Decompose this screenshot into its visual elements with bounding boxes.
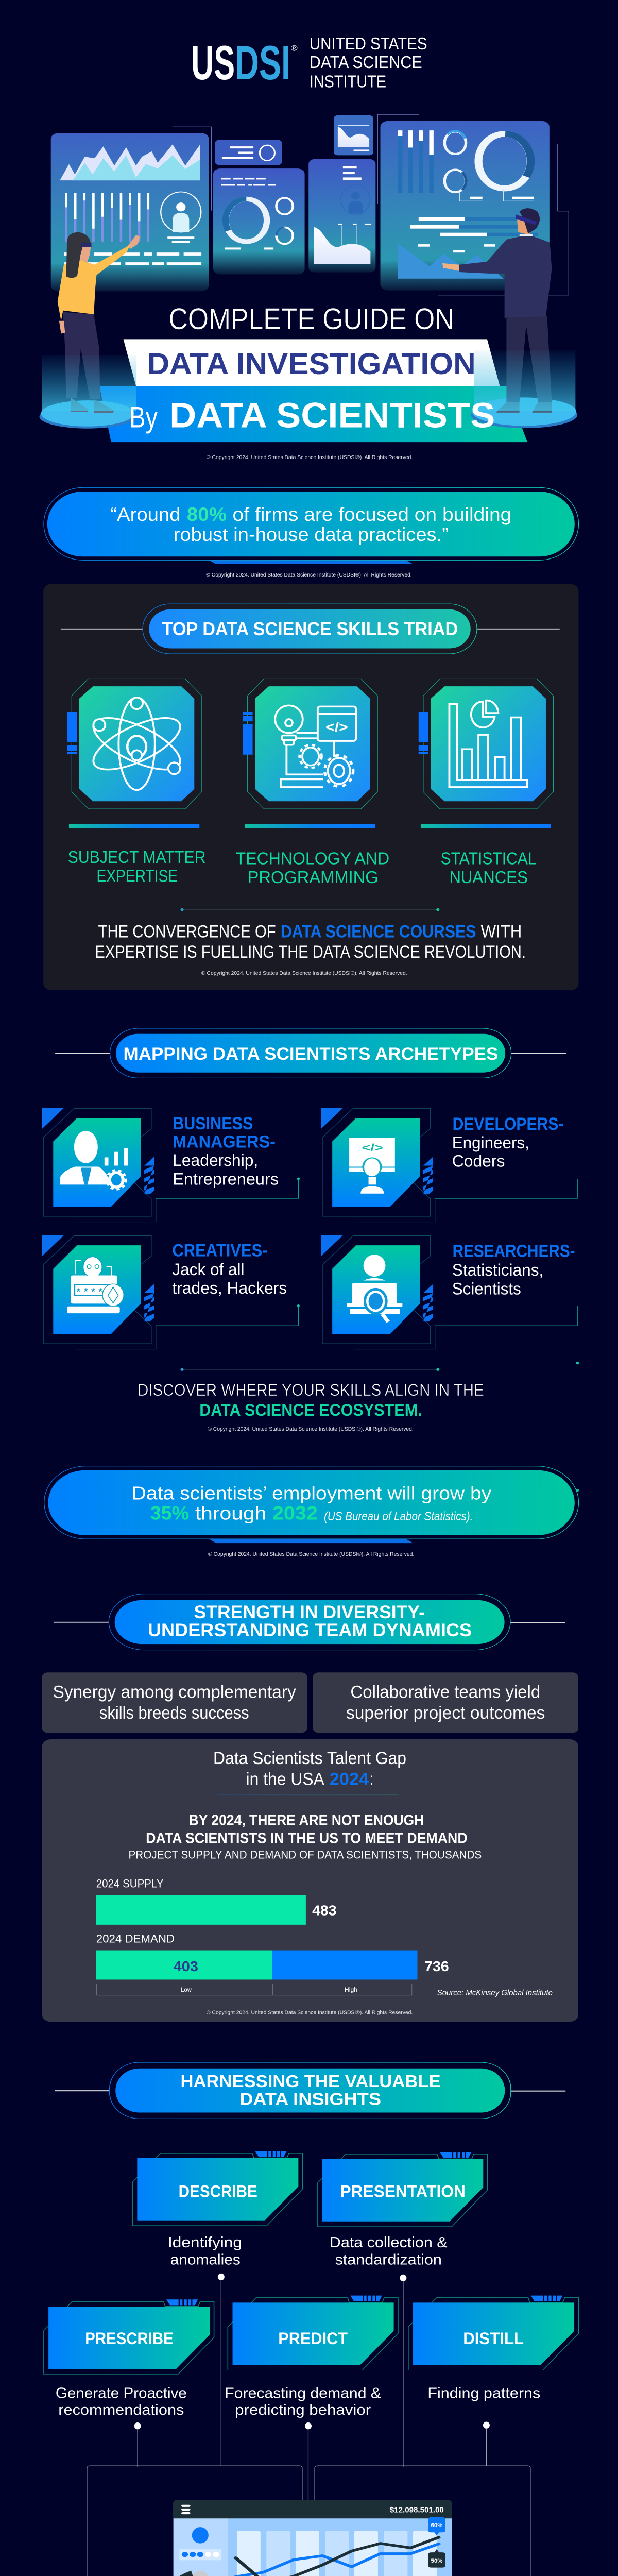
card: predict [225, 2296, 398, 2418]
dashboard panel: left [51, 133, 209, 291]
archetype: creatives [42, 1235, 300, 1349]
skill: statistical nuances [419, 679, 553, 887]
skill: subject matter expertise: SUBJECT MATTER [68, 849, 205, 867]
section: hero header [40, 32, 577, 460]
section: analytics illustration [46, 2500, 574, 2576]
copyright: © Copyright 2024. United States Data Science Institute (USDSI®). All Rights Reserved. [201, 970, 407, 976]
dashboard panel: small top [215, 140, 282, 165]
archetype: business managers: MANAGERS- [173, 1132, 276, 1151]
archetype: creatives: Jack of all [172, 1260, 244, 1279]
logo: UNITED STATES [310, 34, 427, 53]
text block: convergence: WITH [481, 921, 522, 941]
card: presentation: standardization [335, 2251, 442, 2268]
copyright: © Copyright 2024. United States Data Science Institute (USDSI®). All Rights Reserved. [207, 2010, 413, 2015]
source note: Source: McKinsey Global Institute [437, 1988, 553, 1997]
card: presentation: PRESENTATION [340, 2181, 466, 2200]
card: describe: DESCRIBE [179, 2181, 258, 2200]
title banner: gradient strip [99, 386, 527, 442]
dashboard panel: middle [213, 168, 305, 275]
dashboard panel: tall [308, 159, 375, 273]
card: prescribe: PRESCRIBE [85, 2329, 174, 2348]
heading: harnessing the valuable data insights: HARNESSING THE VALUABLE [181, 2072, 441, 2091]
platform: right [471, 397, 577, 428]
divider dots [181, 908, 439, 911]
callout: 80% of firms: of firms are focused on building [233, 504, 511, 525]
panel title: 2024 [330, 1770, 369, 1789]
archetype: developers: DEVELOPERS- [453, 1114, 563, 1133]
icon: developer [349, 1138, 395, 1194]
heading: top data science skills triad [61, 604, 560, 654]
title: complete guide on: COMPLETE GUIDE ON [169, 302, 454, 336]
copyright: © Copyright 2024. United States Data Science Institute (USDSI®). All Rights Reserved. [208, 1426, 414, 1432]
analytics screen: 60% [431, 2522, 443, 2529]
platform: left [40, 400, 135, 429]
bar chart: supply and demand: Low [181, 1987, 192, 1993]
archetype: creatives: CREATIVES- [172, 1241, 268, 1260]
icon: hacker laptop [67, 1257, 124, 1313]
logo: DATA SCIENCE [310, 53, 422, 72]
card: predict: Forecasting demand & [225, 2385, 381, 2401]
card: prescribe [44, 2299, 214, 2418]
heading: harnessing the valuable data insights [55, 2062, 565, 2119]
archetype: developers [321, 1108, 577, 1222]
callout: employment growth [44, 1466, 579, 1543]
section: quote and skills triad [43, 487, 578, 990]
card: presentation [317, 2152, 488, 2268]
callout: 80% of firms [44, 487, 578, 564]
title text: by data scientists: DATA SCIENTISTS [169, 396, 495, 435]
chart heading: BY 2024, THERE ARE NOT ENOUGH [189, 1812, 424, 1829]
callout: employment growth: (US Bureau of Labor Statistics). [324, 1510, 473, 1523]
text block: discover [138, 1381, 484, 1419]
skill: statistical nuances: STATISTICAL [441, 850, 537, 868]
card: presentation: Data collection & [330, 2234, 448, 2251]
archetype: business managers [42, 1108, 300, 1222]
card: collaborative teams: superior project outcomes [346, 1703, 545, 1723]
analytics screen: $12.098.501.00 [390, 2506, 444, 2514]
callout: 80% of firms: robust in-house data practices.” [174, 524, 449, 546]
icon: atom [85, 698, 188, 790]
card: describe: Identifying [168, 2234, 242, 2251]
bar chart: supply and demand [96, 1878, 449, 1995]
heading: harnessing the valuable data insights: DATA INSIGHTS [239, 2090, 381, 2109]
archetype: business managers: Entrepreneurs [173, 1170, 279, 1189]
figure: man [442, 208, 552, 413]
panel title: Data Scientists Talent Gap [213, 1749, 406, 1768]
card: predict: PREDICT [278, 2329, 348, 2348]
archetype: developers: </> [362, 1142, 383, 1154]
connector lines and dots [134, 2274, 490, 2534]
skill: technology and programming: PROGRAMMING [248, 868, 379, 887]
chart heading: PROJECT SUPPLY AND DEMAND OF DATA SCIENTISTS, THOUSANDS [128, 1849, 482, 1861]
section: archetypes [42, 1028, 579, 1557]
text block: discover: DISCOVER WHERE YOUR SKILLS ALIGN IN THE [138, 1381, 484, 1400]
analytics screen [174, 2500, 452, 2576]
card: describe [132, 2151, 303, 2268]
card: distill [408, 2296, 578, 2401]
card: synergy [42, 1672, 307, 1733]
divider dots [181, 1362, 579, 1371]
bar chart: supply and demand: 736 [424, 1958, 449, 1974]
archetype: business managers: Leadership, [173, 1151, 258, 1170]
archetype: developers: Engineers, [452, 1133, 529, 1152]
skill: subject matter expertise: EXPERTISE [97, 867, 178, 886]
skill: statistical nuances: NUANCES [449, 868, 528, 887]
logo: DSI [235, 36, 290, 90]
archetype: researchers: Statisticians, [452, 1261, 543, 1280]
card: predict: predicting behavior [235, 2401, 371, 2418]
archetype: developers: Coders [452, 1152, 505, 1171]
card: collaborative teams: Collaborative teams yield [350, 1683, 540, 1702]
logo: INSTITUTE [310, 72, 386, 91]
card: prescribe: recommendations [58, 2401, 184, 2418]
skill: technology and programming [236, 679, 389, 887]
logo: ® [291, 44, 298, 53]
panel title: in the USA [246, 1770, 324, 1789]
title banner: data investigation: DATA INVESTIGATION [147, 347, 476, 381]
copyright: © Copyright 2024. United States Data Science Institute (USDSI®). All Rights Reserved. [207, 454, 413, 460]
dashboard panel: small chart [334, 115, 373, 155]
callout: 80% of firms: 80% [187, 504, 227, 525]
callout: employment growth: 35% [150, 1502, 189, 1524]
callout: 80% of firms: “Around [110, 504, 181, 525]
section: data insights [44, 2062, 578, 2534]
archetype: creatives: trades, Hackers [172, 1279, 287, 1297]
connector frames behind screen [87, 2466, 530, 2576]
chart heading [128, 1812, 482, 1861]
archetype: researchers: Scientists [452, 1279, 521, 1298]
copyright: © Copyright 2024. United States Data Science Institute (USDSI®). All Rights Reserved. [208, 1551, 414, 1557]
heading: mapping data scientists archetypes [55, 1028, 566, 1078]
card: describe: anomalies [170, 2251, 241, 2268]
card: distill: DISTILL [463, 2329, 524, 2348]
title text: by data scientists: By [129, 401, 158, 434]
title banner: data investigation [124, 339, 500, 386]
archetype: researchers [321, 1235, 577, 1349]
heading: mapping data scientists archetypes: MAPPING DATA SCIENTISTS ARCHETYPES [124, 1044, 498, 1063]
dashboard panel: right [381, 121, 550, 291]
bar chart: supply and demand: 2024 SUPPLY [96, 1878, 164, 1890]
bar chart: supply and demand: High [345, 1987, 357, 1993]
card: prescribe: Generate Proactive [56, 2385, 187, 2401]
icon: business manager [60, 1131, 128, 1190]
text block: discover: DATA SCIENCE ECOSYSTEM. [199, 1401, 422, 1419]
frame lines around dashboards [173, 114, 569, 295]
copyright: © Copyright 2024. United States Data Science Institute (USDSI®). All Rights Reserved. [206, 572, 412, 578]
figure: woman [58, 232, 140, 413]
glass overlay: left [42, 355, 136, 411]
skill: technology and programming: TECHNOLOGY AND [236, 850, 389, 868]
archetype: creatives: **** [76, 1286, 103, 1296]
heading: top data science skills triad: TOP DATA SCIENCE SKILLS TRIAD [162, 619, 458, 639]
heading: strength in diversity: UNDERSTANDING TEAM DYNAMICS [148, 1620, 472, 1640]
card: synergy: Synergy among complementary [53, 1683, 296, 1702]
card: distill: Finding patterns [427, 2385, 540, 2401]
analytics screen: 50% [431, 2558, 443, 2564]
figure: man at screen [162, 2571, 257, 2576]
icon: statistics chart [449, 700, 527, 787]
bar chart: supply and demand: 403 [174, 1958, 198, 1974]
bar chart: supply and demand: 2024 DEMAND [96, 1933, 175, 1945]
logo: US [191, 36, 235, 90]
chart heading: DATA SCIENTISTS IN THE US TO MEET DEMAND [146, 1830, 468, 1847]
skill: technology and programming: </> [325, 720, 348, 735]
logo [191, 32, 427, 92]
panel: talent gap [42, 1739, 578, 2022]
panel title [213, 1749, 406, 1795]
skill: subject matter expertise [67, 679, 205, 886]
callout: employment growth: Data scientists’ employment will grow by [132, 1483, 492, 1504]
card: synergy: skills breeds success [99, 1703, 249, 1723]
card: collaborative teams [313, 1672, 578, 1733]
callout: employment growth: 2032 [272, 1502, 318, 1524]
icon: technology [275, 705, 356, 787]
icon: researcher [347, 1255, 402, 1322]
archetype: researchers: RESEARCHERS- [453, 1241, 575, 1261]
bar chart: supply and demand: 483 [312, 1902, 337, 1919]
heading: strength in diversity: STRENGTH IN DIVERSITY- [194, 1602, 425, 1622]
text block: convergence [95, 921, 526, 962]
panel: skills triad [43, 584, 578, 990]
callout: employment growth: through [195, 1503, 266, 1524]
heading: strength in diversity [54, 1594, 565, 1650]
glass overlay: right [474, 350, 575, 411]
section: team dynamics [42, 1594, 578, 2022]
text block: convergence: THE CONVERGENCE OF [98, 921, 276, 941]
panel title: : [370, 1770, 373, 1789]
archetype: business managers: BUSINESS [173, 1113, 253, 1133]
text block: convergence: DATA SCIENCE COURSES [281, 921, 476, 941]
